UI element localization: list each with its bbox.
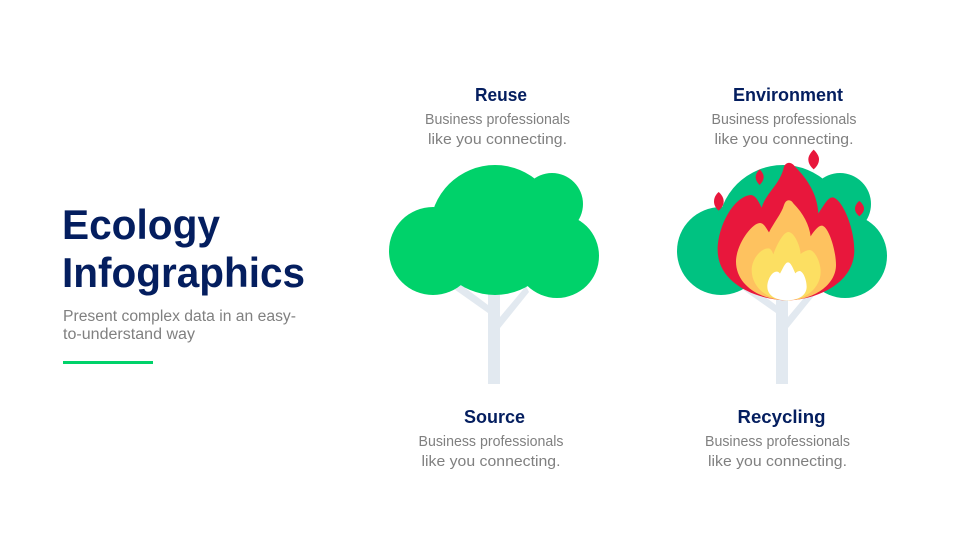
text block: Reuse: like you connecting. (428, 132, 567, 148)
tree canopy (389, 165, 599, 298)
embers (714, 150, 864, 216)
text block: Reuse: Business professionals (425, 112, 570, 128)
icon: burning tree (677, 150, 887, 384)
text block: Reuse: Reuse (475, 84, 527, 105)
text block: Source: like you connecting. (422, 454, 560, 470)
text block: Reuse (425, 84, 570, 148)
burning tree trunk and branches (742, 280, 817, 384)
yellow flame (752, 232, 821, 300)
text block: Environment: Business professionals (712, 112, 856, 128)
title: Infographics (62, 249, 305, 296)
accent line (63, 361, 153, 364)
title (62, 201, 305, 296)
text block: Environment (712, 84, 856, 148)
flames (718, 163, 854, 300)
text block: Recycling (705, 406, 850, 470)
text block: Recycling: like you connecting. (708, 454, 847, 470)
text block: Recycling: Recycling (738, 406, 826, 427)
text block: Source: Business professionals (418, 434, 564, 450)
white flame core (767, 262, 807, 300)
tree trunk and branches (454, 280, 529, 384)
subtitle (63, 308, 296, 343)
subtitle: to-understand way (63, 326, 195, 343)
subtitle: Present complex data in an easy- (63, 308, 296, 325)
burning tree canopy (677, 165, 887, 298)
text block: Environment: like you connecting. (714, 132, 854, 148)
icon: healthy tree (389, 165, 599, 384)
outer red flame (718, 163, 854, 300)
title: Ecology (62, 201, 221, 248)
text block: Source (418, 406, 564, 470)
text block: Recycling: Business professionals (705, 434, 850, 450)
text block: Source: Source (464, 406, 525, 427)
orange flame (736, 200, 836, 300)
text block: Environment: Environment (733, 84, 843, 105)
